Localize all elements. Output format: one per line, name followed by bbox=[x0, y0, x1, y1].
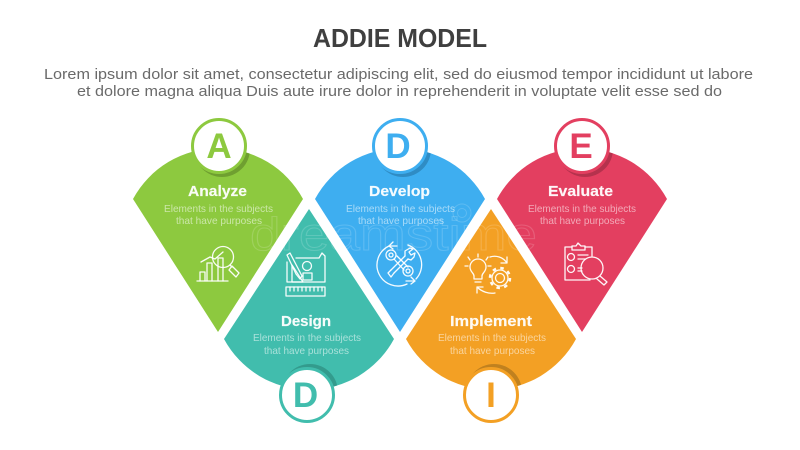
develop description: that have purposes bbox=[358, 215, 444, 227]
implement description bbox=[438, 332, 546, 357]
panel: design bbox=[224, 209, 394, 422]
analyze description: that have purposes bbox=[176, 215, 262, 227]
subtitle text block: et dolore magna aliqua Duis aute irure dolor in reprehenderit in voluptate velit esse sed do bbox=[77, 83, 722, 100]
subtitle text block: Lorem ipsum dolor sit amet, consectetur adipiscing elit, sed do eiusmod tempor incididunt ut labore bbox=[44, 66, 753, 83]
implement badge shadow bbox=[472, 364, 521, 386]
analyze description: Elements in the subjects bbox=[164, 203, 273, 215]
implement badge bbox=[464, 368, 518, 422]
evaluate description bbox=[528, 203, 636, 227]
evaluate badge: E bbox=[569, 127, 593, 166]
subtitle text block bbox=[44, 66, 753, 100]
watermark: dreamstime bbox=[250, 208, 537, 260]
develop description: Elements in the subjects bbox=[346, 203, 455, 215]
icon: bulb, gear and arrows bbox=[465, 254, 510, 293]
implement heading: Implement bbox=[450, 314, 532, 330]
analyze badge bbox=[192, 120, 246, 172]
evaluate heading: Evaluate bbox=[548, 184, 613, 200]
design shape bbox=[224, 209, 394, 390]
analyze shape bbox=[133, 148, 303, 332]
icon: chart with magnifier bbox=[197, 246, 239, 281]
evaluate description: that have purposes bbox=[540, 215, 625, 227]
design badge bbox=[280, 368, 334, 422]
panel: develop bbox=[315, 120, 485, 332]
panel: analyze bbox=[133, 120, 303, 332]
title: ADDIE MODEL bbox=[313, 23, 487, 53]
develop description bbox=[346, 203, 455, 227]
design description bbox=[253, 332, 361, 357]
analyze badge: A bbox=[206, 127, 232, 166]
develop badge: D bbox=[385, 127, 411, 166]
icon: clipboard with magnifier bbox=[565, 243, 607, 285]
analyze heading: Analyze bbox=[188, 184, 247, 200]
implement shape bbox=[406, 209, 576, 390]
evaluate description: Elements in the subjects bbox=[528, 203, 636, 215]
implement description: that have purposes bbox=[450, 345, 535, 357]
develop heading: Develop bbox=[369, 184, 430, 200]
panel: implement bbox=[406, 209, 576, 422]
design heading: Design bbox=[281, 314, 331, 330]
panel: evaluate bbox=[497, 120, 667, 332]
design description: Elements in the subjects bbox=[253, 332, 361, 344]
evaluate badge shadow bbox=[563, 152, 613, 177]
develop shape bbox=[315, 148, 485, 332]
design description: that have purposes bbox=[264, 345, 349, 357]
evaluate badge bbox=[556, 120, 608, 172]
icon: crossed tools with arrows bbox=[377, 242, 422, 286]
design badge shadow bbox=[289, 364, 338, 386]
icon: blueprint and ruler bbox=[286, 253, 325, 296]
implement badge: I bbox=[486, 376, 496, 415]
evaluate shape bbox=[497, 148, 667, 332]
implement description: Elements in the subjects bbox=[438, 332, 546, 344]
analyze description bbox=[164, 203, 273, 227]
develop badge shadow bbox=[382, 152, 431, 177]
develop badge bbox=[374, 120, 426, 172]
analyze badge shadow bbox=[200, 152, 250, 177]
design badge: D bbox=[293, 376, 318, 415]
